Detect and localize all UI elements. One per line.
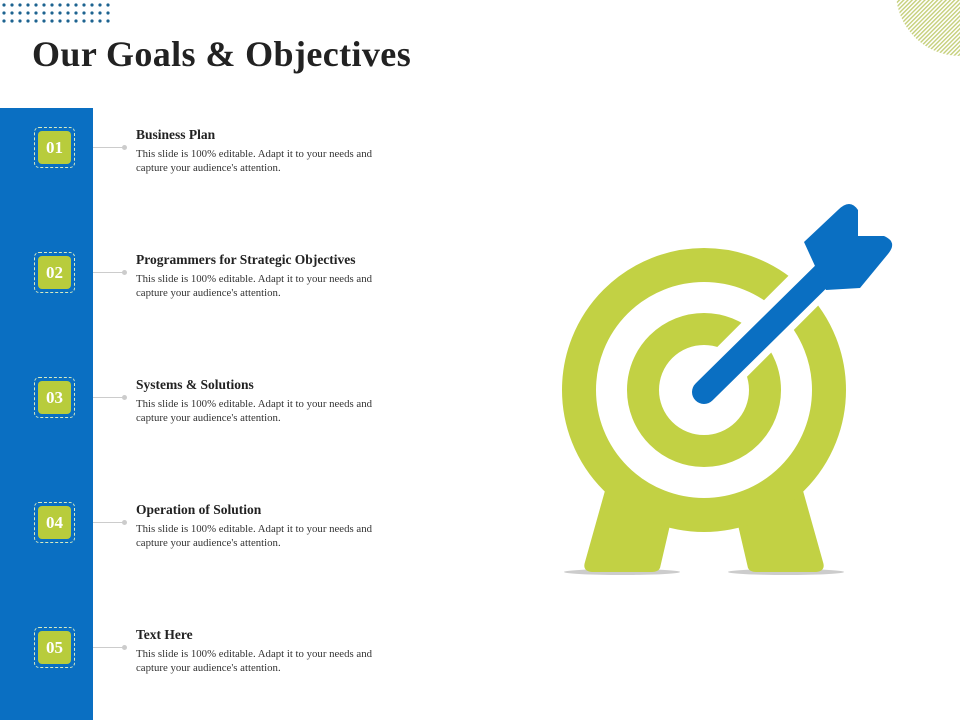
item 05: This slide is 100% editable. Adapt it to your needs and capture your audience's attention. (136, 648, 372, 674)
item 01: Business Plan (136, 127, 215, 142)
item 02: Programmers for Strategic Objectives (136, 252, 356, 267)
item 03 (136, 377, 372, 424)
badge 04: 04 (46, 513, 63, 532)
target illustration (562, 204, 892, 575)
badge 05: 05 (46, 638, 63, 657)
arrow (704, 204, 892, 392)
rings (579, 265, 829, 515)
badge 02 (34, 252, 75, 293)
title: Our Goals & Objectives (32, 34, 411, 74)
item 05: Text Here (136, 627, 193, 642)
badge 03: 03 (46, 388, 63, 407)
item 05 (136, 627, 372, 674)
badge 02: 02 (46, 263, 63, 282)
badge 01 (34, 127, 75, 168)
item 03: This slide is 100% editable. Adapt it to your needs and capture your audience's attention. (136, 398, 372, 424)
item 01 (136, 127, 372, 174)
decoration: striped circle (896, 0, 960, 56)
item 03: Systems & Solutions (136, 377, 254, 392)
decoration: dot grid (2, 3, 110, 23)
badge 01: 01 (46, 138, 63, 157)
item 02 (136, 252, 372, 299)
badge 03 (34, 377, 75, 418)
item 04: This slide is 100% editable. Adapt it to your needs and capture your audience's attention. (136, 523, 372, 549)
legs (584, 480, 670, 572)
item 04: Operation of Solution (136, 502, 261, 517)
badge 05 (34, 627, 75, 668)
item 04 (136, 502, 372, 549)
item 01: This slide is 100% editable. Adapt it to your needs and capture your audience's attention. (136, 148, 372, 174)
item 02: This slide is 100% editable. Adapt it to your needs and capture your audience's attention. (136, 273, 372, 299)
shadows (564, 569, 680, 575)
sidebar (0, 108, 93, 720)
badge 04 (34, 502, 75, 543)
ring gaps (704, 224, 870, 390)
